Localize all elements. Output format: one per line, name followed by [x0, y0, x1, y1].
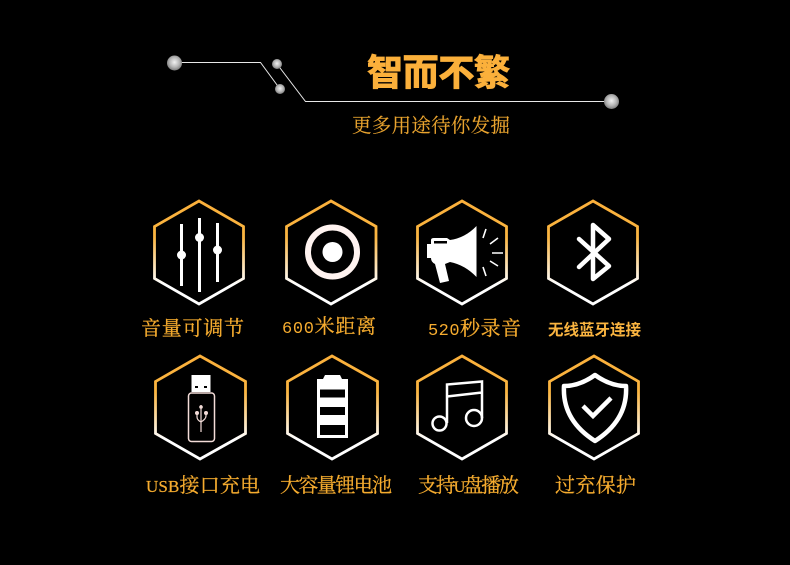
icon: bluetooth	[579, 225, 609, 279]
icon: sliders	[177, 218, 222, 292]
title: 智而不繁	[367, 52, 510, 93]
feature: U disk playback	[418, 356, 519, 497]
icon: music note	[432, 382, 482, 430]
label: 无线蓝牙连接	[548, 320, 641, 339]
icon: target	[308, 228, 357, 276]
hexagon frame	[156, 356, 246, 459]
label: 大容量锂电池	[280, 474, 392, 497]
feature: 520 s recording	[418, 201, 521, 341]
hexagon frame	[418, 356, 506, 459]
header circuit decoration	[167, 56, 619, 109]
hexagon frame	[286, 201, 376, 304]
label: 支持U盘播放	[418, 474, 519, 497]
label: 520秒录音	[428, 317, 521, 341]
feature: 600 m range	[282, 201, 376, 339]
subtitle: 更多用途待你发掘	[352, 115, 510, 137]
icon: USB drive	[188, 375, 214, 442]
label: USB接口充电	[146, 474, 260, 497]
hexagon frame	[418, 201, 506, 304]
feature: volume adjustment	[141, 201, 244, 340]
hexagon frame	[154, 201, 244, 304]
icon: shield with check	[564, 375, 626, 441]
hexagon frame	[550, 356, 638, 459]
hexagon frame	[548, 201, 638, 304]
label: 音量可调节	[141, 317, 244, 340]
icon: battery	[317, 375, 348, 438]
label: 过充保护	[555, 474, 636, 497]
hexagon frame	[288, 356, 378, 459]
icon: megaphone	[427, 226, 503, 283]
feature: lithium battery	[280, 356, 392, 497]
label: 600米距离	[282, 315, 376, 339]
feature: USB charging	[146, 356, 260, 497]
feature: overcharge protection	[550, 356, 638, 497]
feature: bluetooth	[548, 201, 641, 339]
